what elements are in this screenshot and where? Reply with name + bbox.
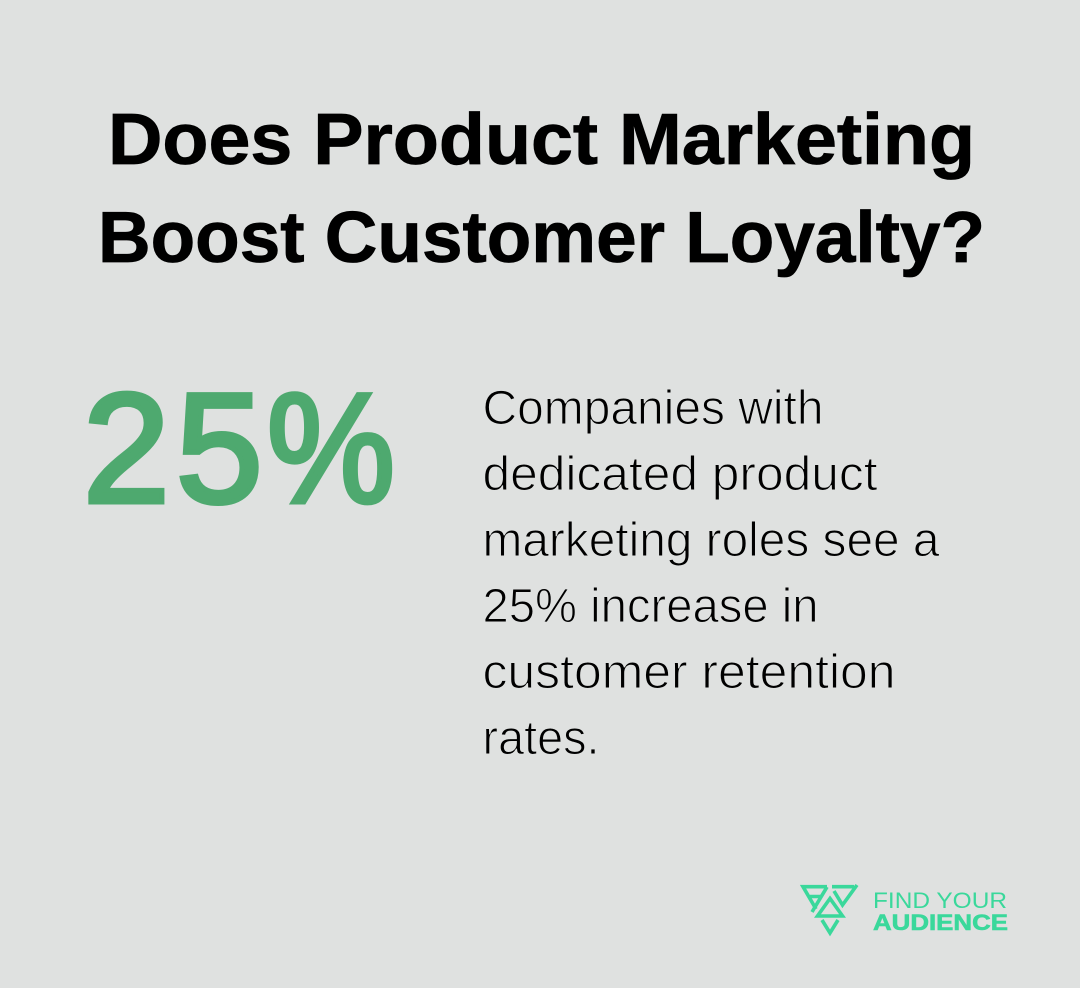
description text: dedicated product [482,448,878,501]
title: Boost Customer Loyalty? [98,198,985,278]
logo wordmark [873,888,1008,935]
description text: marketing roles see a [482,514,940,567]
description text [482,382,940,765]
title [98,100,985,278]
logo wordmark: FIND YOUR [873,888,1007,913]
description text: rates. [482,712,600,765]
logo: Find Your Audience [803,885,1008,935]
title: Does Product Marketing [108,100,975,180]
icon: logo triangles [803,885,857,933]
logo wordmark: AUDIENCE [873,910,1008,935]
big stat: 25%: 25 [83,362,263,536]
description text: 25% increase in [482,580,818,633]
description text: Companies with [482,382,824,435]
description text: customer retention [482,646,896,699]
big stat: 25%: % [267,362,395,536]
